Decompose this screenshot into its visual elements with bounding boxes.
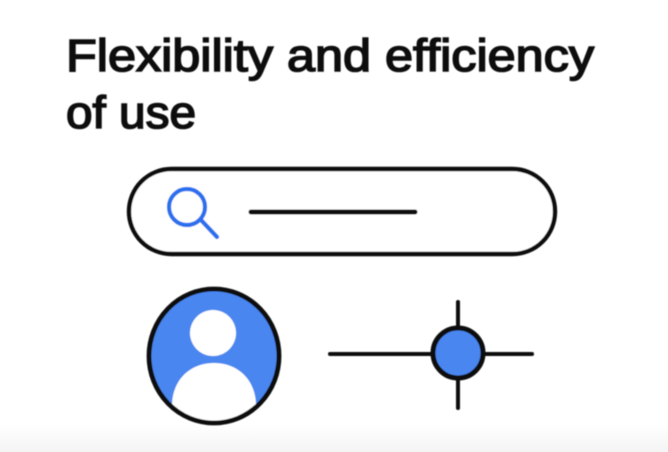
- search bar: [129, 169, 555, 254]
- title: Flexibility and efficiency: [66, 30, 595, 81]
- slider handle: [433, 328, 483, 378]
- avatar outline: [149, 289, 279, 423]
- icon: magnifying glass: [169, 189, 217, 237]
- title: [66, 30, 595, 138]
- title: of use: [66, 87, 196, 138]
- icon: user avatar: [149, 289, 279, 430]
- search text placeholder line: [251, 210, 415, 214]
- icon: slider control: [330, 302, 532, 408]
- avatar body: [172, 363, 256, 430]
- avatar head: [190, 310, 236, 356]
